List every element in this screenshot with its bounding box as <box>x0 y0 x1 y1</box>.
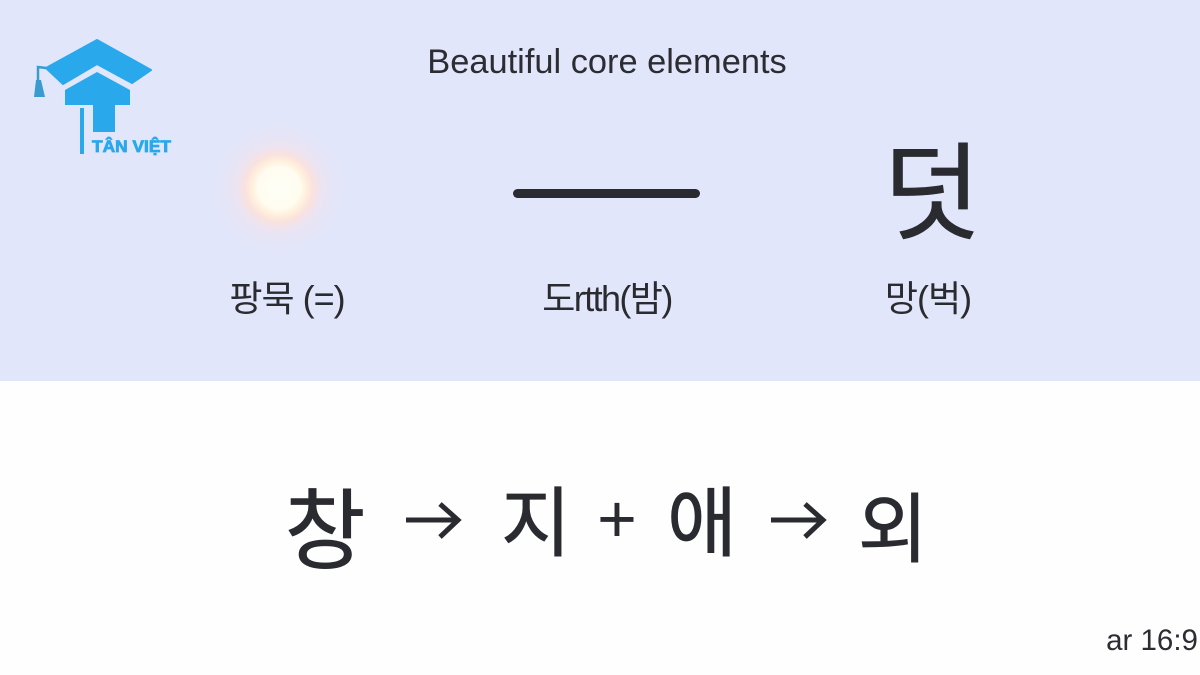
formula: 외: 외 <box>858 488 928 573</box>
formula: 애: 애 <box>667 482 737 567</box>
formula: plus: + <box>597 481 637 557</box>
formula: 창: 창 <box>285 482 365 581</box>
panel: formula <box>0 381 1200 675</box>
label: line: 도rtth(밤) <box>542 278 672 319</box>
note: aspect ratio: ar 16:9 <box>1106 624 1198 657</box>
label: dot: 팡묵 (=) <box>229 278 345 319</box>
panel: core elements <box>0 0 1200 381</box>
label: syllable: 망(벅) <box>885 278 971 319</box>
icon: glowing dot <box>209 118 349 258</box>
logo: Tan Viet: TÂN VIỆT <box>92 137 171 156</box>
logo: Tan Viet <box>34 39 172 156</box>
arrow: first <box>406 502 462 539</box>
formula: 지: 지 <box>501 482 571 567</box>
heading: Beautiful core elements <box>427 43 787 81</box>
glyph: syllable: 덧 <box>883 136 981 254</box>
arrow: second <box>771 502 827 539</box>
icon: horizontal line <box>513 189 700 198</box>
